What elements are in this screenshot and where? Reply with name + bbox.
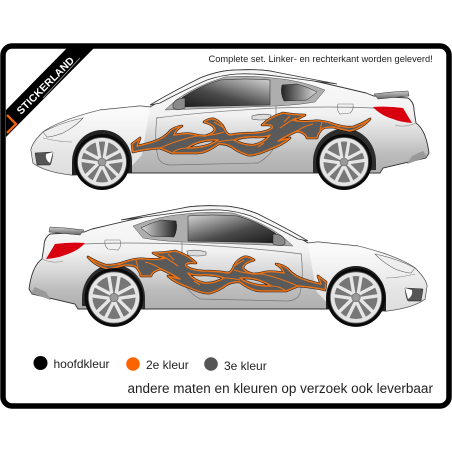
logo underline	[43, 58, 80, 98]
rear wheel	[316, 134, 372, 190]
decal	[88, 251, 326, 293]
decal	[132, 113, 370, 155]
logo ribbon: Stickerland	[6, 47, 95, 137]
legend: 2e kleur	[146, 358, 189, 372]
frame	[3, 46, 449, 406]
legend: 3e kleur	[224, 359, 267, 373]
legend: hoofdkleur	[54, 357, 110, 371]
logo icon: orange chevron	[7, 115, 16, 133]
front wheel	[327, 268, 385, 327]
legend	[34, 356, 267, 373]
logo ribbon: Stickerland: STICKERLAND	[15, 54, 77, 117]
availability note: andere maten en kleuren op verzoek ook leverbaar	[128, 381, 433, 396]
car: right-facing with decal	[29, 206, 427, 327]
front wheel	[74, 134, 130, 190]
car: left-facing with decal	[31, 70, 429, 190]
rear wheel	[85, 268, 143, 327]
top note: Complete set. Linker- en rechterkant worden geleverd!	[208, 54, 433, 64]
